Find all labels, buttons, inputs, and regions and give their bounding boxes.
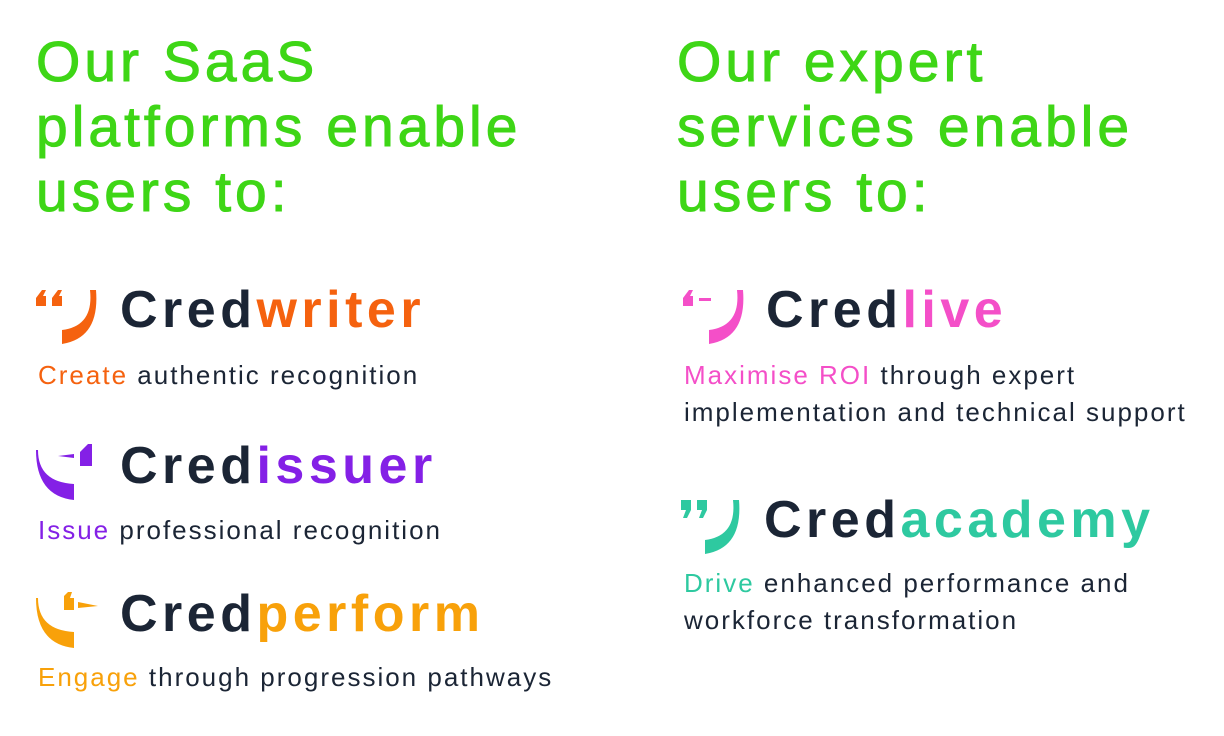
title: SaaS platforms: Our SaaS: [36, 30, 318, 94]
text: Credlive description: implementation and technical support: [684, 397, 1187, 427]
title: SaaS platforms: [36, 30, 521, 224]
text: Credwriter description: Create authentic recognition: [38, 360, 419, 390]
text: Credacademy description: workforce transformation: [684, 605, 1018, 635]
text: Credacademy description: [684, 568, 1130, 635]
icon: Credacademy: [681, 500, 740, 554]
title: expert services: Our expert: [677, 30, 986, 94]
brand: Credperform: Credperform: [120, 585, 484, 643]
title: SaaS platforms: users to:: [36, 160, 291, 224]
title: expert services: [677, 30, 1133, 224]
icon: Credperform: [36, 592, 98, 648]
brand: Credlive: Credlive: [766, 281, 1007, 339]
title: expert services: users to:: [677, 160, 932, 224]
title: SaaS platforms: platforms enable: [36, 95, 521, 159]
icon: Credwriter: [36, 290, 96, 344]
text: Credperform description: Engage through progression pathways: [38, 662, 553, 692]
text: Credlive description: Maximise ROI through expert: [684, 360, 1076, 390]
icon: Credlive: [683, 290, 744, 344]
title: expert services: services enable: [677, 95, 1133, 159]
icon: Credissuer: [36, 444, 92, 500]
brand: Credissuer: Credissuer: [120, 437, 437, 495]
text: Credlive description: [684, 360, 1187, 427]
text: Credacademy description: Drive enhanced performance and: [684, 568, 1130, 598]
brand: Credacademy: Credacademy: [764, 491, 1155, 549]
brand: Credwriter: Credwriter: [120, 281, 425, 339]
text: Credissuer description: Issue professional recognition: [38, 515, 442, 545]
